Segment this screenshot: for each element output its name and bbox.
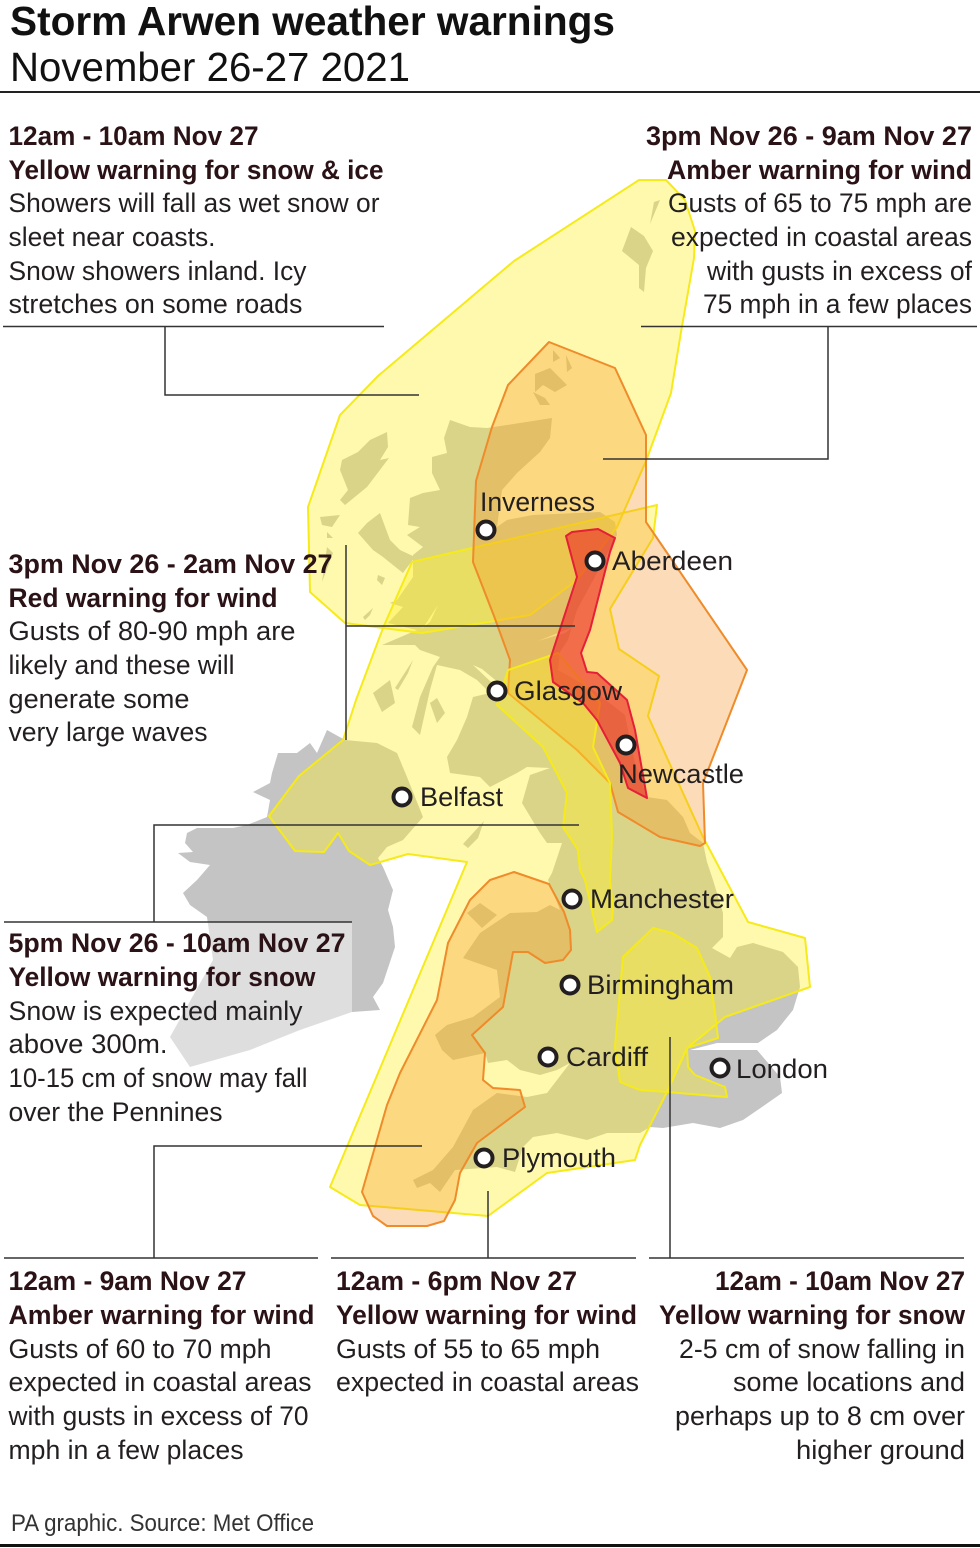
city markers and labels: Belfast [420, 782, 503, 812]
callout: amber wind, west [4, 1146, 422, 1465]
source credit: PA graphic. Source: Met Office [11, 1510, 314, 1537]
callout: amber wind, west: Gusts of 60 to 70 mph [8, 1334, 272, 1364]
panel backing: translucent white behind snow text [5, 922, 352, 1128]
callout: yellow snow, Pennines: over the Pennines [8, 1097, 222, 1127]
callout: yellow snow, Midlands: 12am - 10am Nov 27 [715, 1266, 965, 1296]
callout: yellow snow and ice: Showers will fall as wet snow or [8, 188, 380, 218]
callout: yellow snow, Pennines: above 300m. [8, 1029, 168, 1059]
zone: red wind [550, 529, 647, 798]
city markers and labels: Newcastle [618, 759, 744, 789]
callout: amber wind, west: Amber warning for wind [8, 1300, 314, 1330]
land: Scottish islands [320, 200, 660, 928]
callout: yellow snow, Pennines: Yellow warning for snow [8, 962, 316, 992]
city markers and labels: London [736, 1054, 828, 1084]
callout: yellow wind: 12am - 6pm Nov 27 [336, 1266, 577, 1296]
callout: yellow snow and ice: sleet near coasts. [8, 222, 216, 252]
callout: red wind: Red warning for wind [8, 583, 278, 613]
callout: yellow snow, Pennines: 10-15 cm of snow may fall [8, 1063, 308, 1093]
city markers and labels: Birmingham [587, 970, 734, 1000]
callout: red wind: likely and these will [8, 650, 234, 680]
callout: yellow snow, Midlands [649, 1037, 966, 1465]
zone: amber wind, south-west [362, 872, 571, 1226]
callout: amber wind, west: mph in a few places [8, 1435, 244, 1465]
callout: yellow wind [331, 1191, 639, 1397]
callout: yellow wind: Yellow warning for wind [336, 1300, 637, 1330]
callout: red wind: very large waves [8, 717, 208, 747]
callout: amber wind, north: Amber warning for wind [667, 155, 972, 185]
title: November 26-27 2021 [10, 44, 410, 90]
callout: amber wind, north: expected in coastal areas [671, 222, 972, 252]
callout: red wind: Gusts of 80-90 mph are [8, 616, 296, 646]
map: British Isles land with warning zones [170, 180, 810, 1226]
callout: amber wind, west: with gusts in excess of 70 [8, 1401, 309, 1431]
callout: yellow snow, Midlands: 2-5 cm of snow falling in [679, 1334, 965, 1364]
callout: amber wind, north [603, 121, 977, 459]
city markers and labels: Cardiff [566, 1042, 649, 1072]
land: sea lochs and firths [420, 605, 573, 688]
land: Great Britain [382, 418, 800, 1192]
callout: yellow snow, Pennines: Snow is expected mainly [8, 996, 303, 1026]
zone: yellow wind, main area [269, 505, 810, 1216]
callout: yellow wind: expected in coastal areas [336, 1367, 639, 1397]
callout: amber wind, west: 12am - 9am Nov 27 [8, 1266, 246, 1296]
zone: yellow snow and ice, Scotland [308, 180, 695, 633]
callout: yellow wind: Gusts of 55 to 65 mph [336, 1334, 600, 1364]
callout: yellow snow, Midlands: higher ground [796, 1435, 965, 1465]
title [10, 0, 615, 90]
callout: amber wind, north: with gusts in excess of [706, 256, 972, 286]
callout: yellow snow, Midlands: perhaps up to 8 cm over [675, 1401, 965, 1431]
callout: yellow snow and ice: Snow showers inland. Icy [8, 256, 307, 286]
callout: red wind: 3pm Nov 26 - 2am Nov 27 [8, 549, 332, 579]
callout: yellow snow, Pennines [4, 825, 579, 1127]
land: Ireland [170, 730, 423, 1067]
callout: yellow snow and ice: Yellow warning for snow & ice [8, 155, 384, 185]
callout: amber wind, west: expected in coastal areas [8, 1367, 312, 1397]
callout: yellow snow, Midlands: some locations and [733, 1367, 965, 1397]
city markers and labels: Plymouth [502, 1143, 616, 1173]
zone: yellow snow, Pennines [497, 653, 613, 932]
city markers and labels: Manchester [590, 884, 734, 914]
callout: amber wind, north: 75 mph in a few places [703, 289, 972, 319]
callout: yellow snow and ice: 12am - 10am Nov 27 [8, 121, 258, 151]
zone: amber wind, north-east [473, 342, 747, 846]
callout: yellow snow, Midlands: Yellow warning for snow [659, 1300, 966, 1330]
callout: red wind [8, 545, 575, 747]
city markers and labels: Inverness [480, 487, 595, 517]
callout: amber wind, north: 3pm Nov 26 - 9am Nov 27 [646, 121, 972, 151]
zone: yellow snow, Midlands [615, 928, 727, 1097]
city markers and labels: Glasgow [514, 676, 623, 706]
callout: yellow snow, Pennines: 5pm Nov 26 - 10am Nov 27 [8, 928, 346, 958]
city markers and labels [394, 487, 828, 1173]
callout: yellow snow and ice: stretches on some roads [8, 289, 302, 319]
callout: yellow snow and ice [3, 121, 419, 395]
callout: amber wind, north: Gusts of 65 to 75 mph are [668, 188, 972, 218]
callout: red wind: generate some [8, 684, 190, 714]
city markers and labels: Aberdeen [612, 546, 733, 576]
